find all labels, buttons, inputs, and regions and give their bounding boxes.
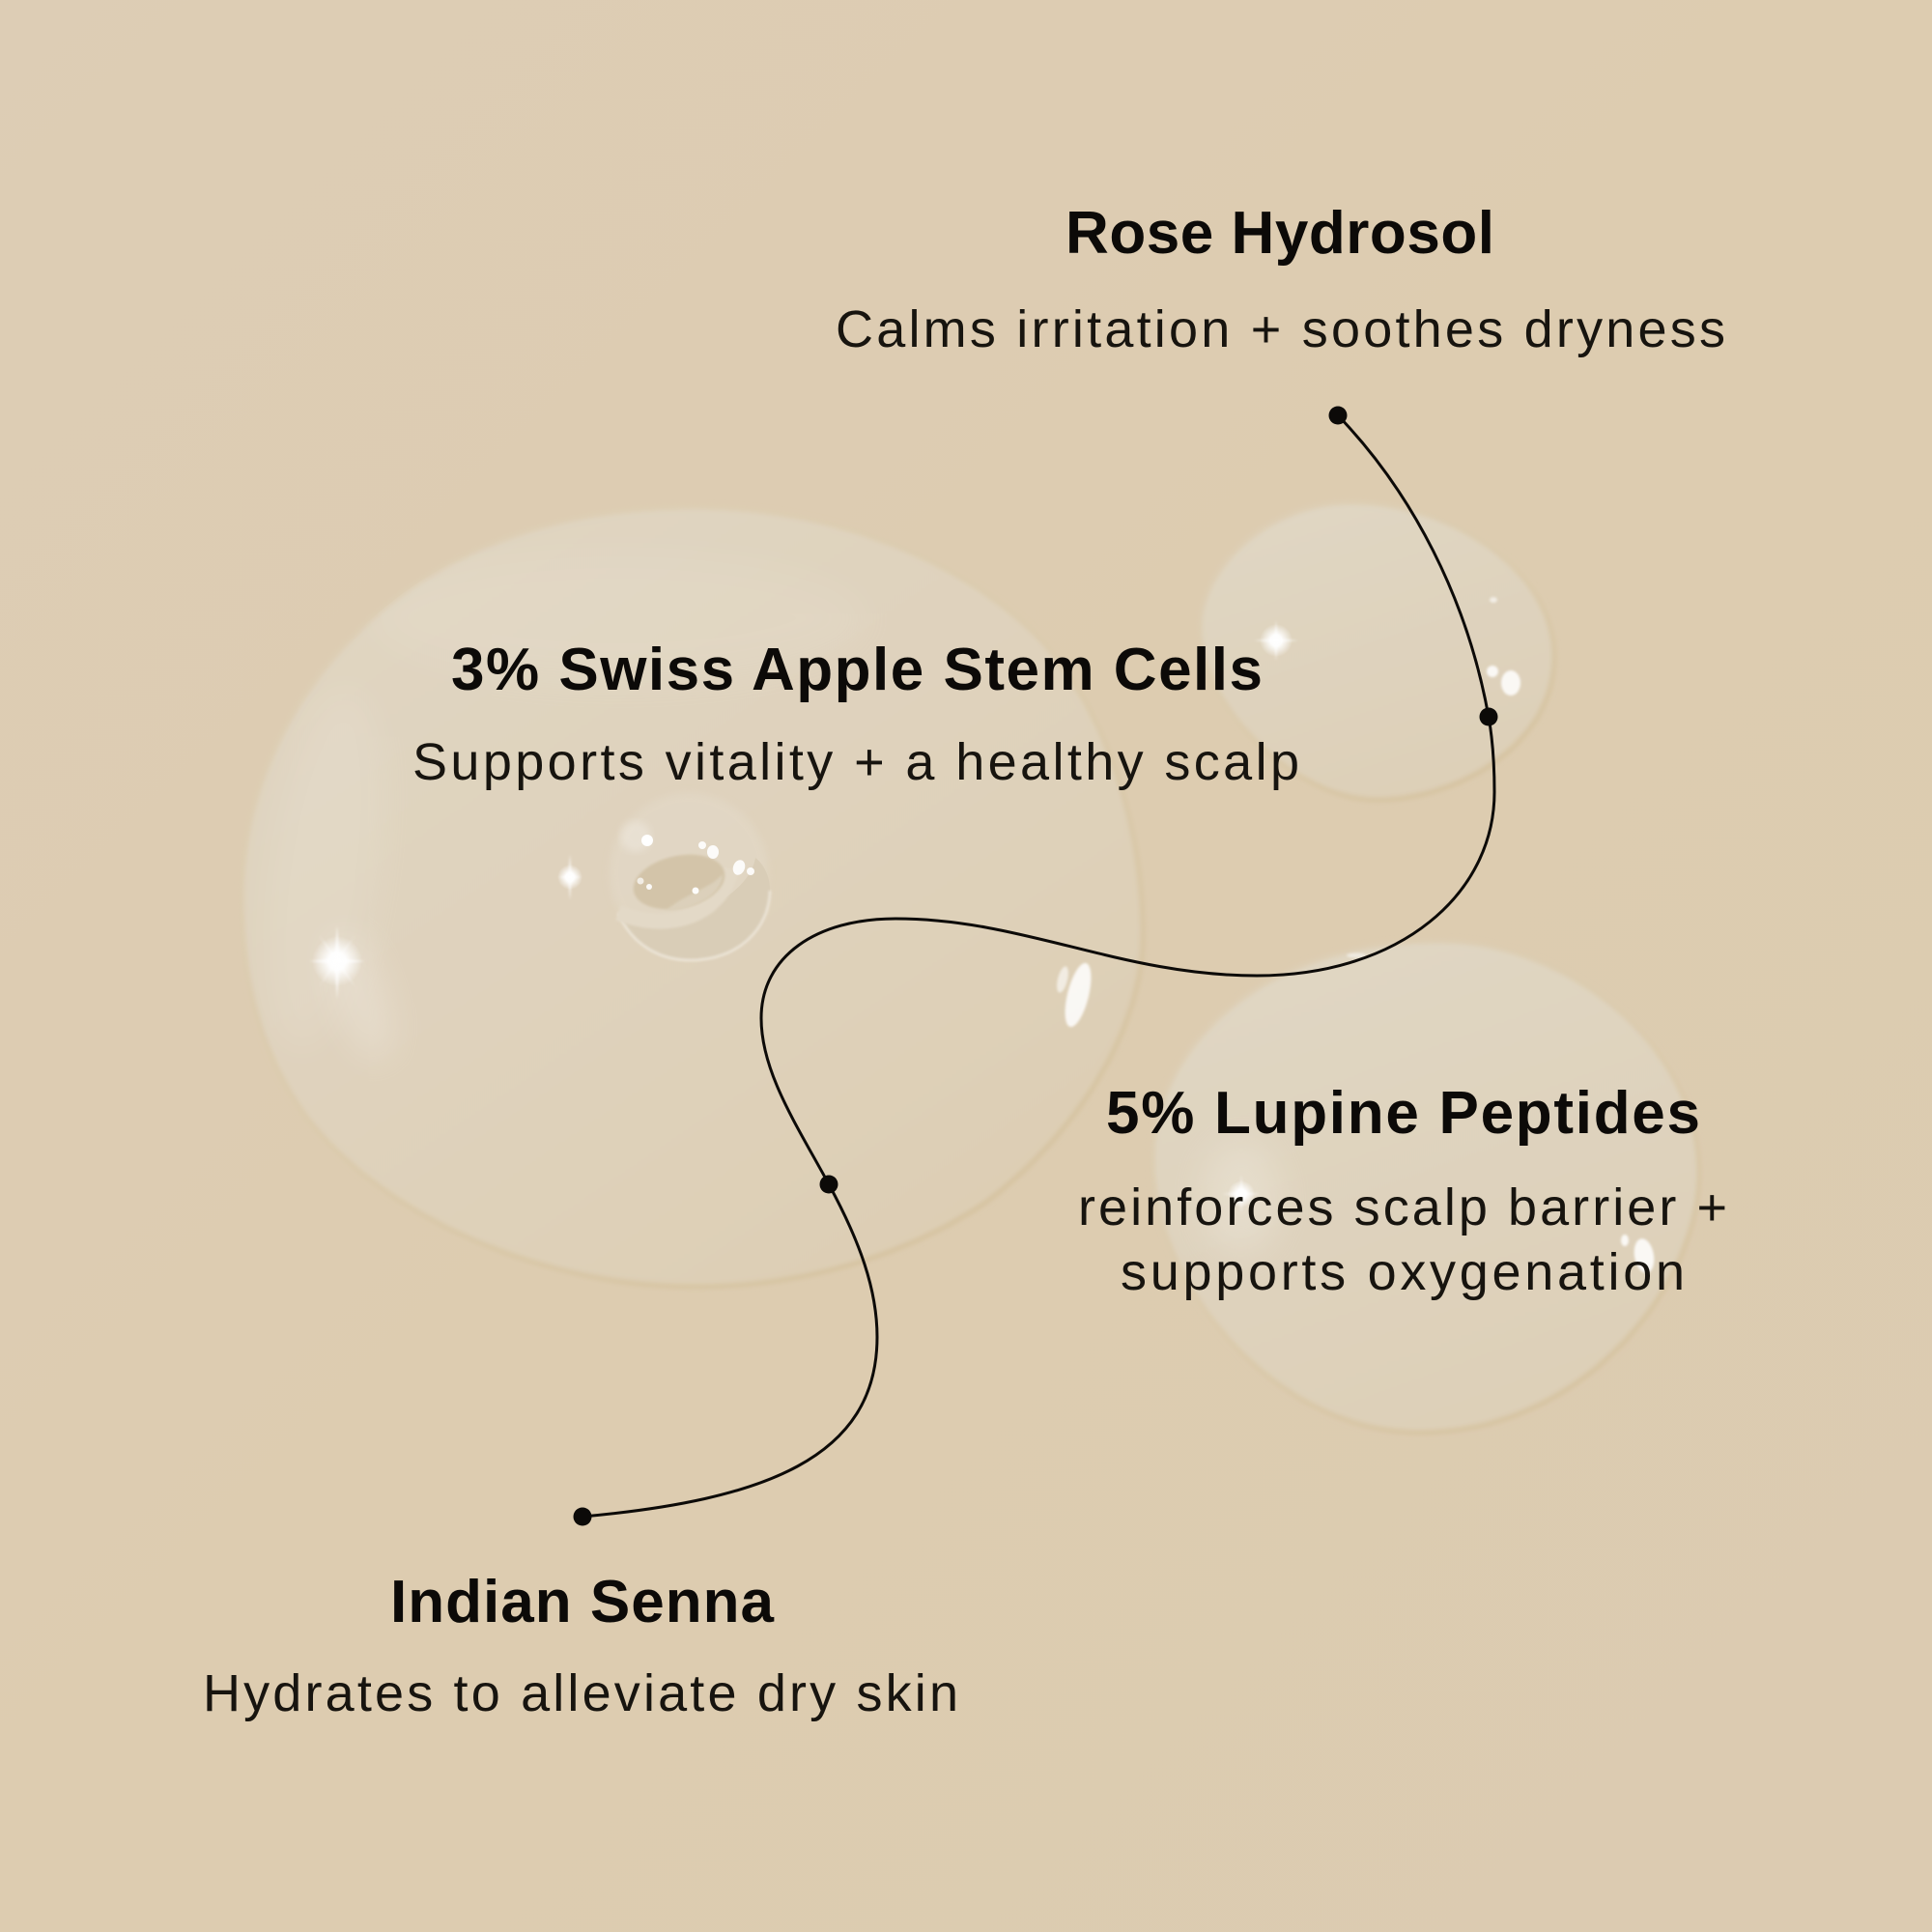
dot: Indian Senna end [574,1507,591,1526]
heading: Rose Hydrosol [1065,200,1494,267]
dot: large drop [819,1175,838,1194]
sparkle: lower drop highlight [1222,1175,1261,1213]
heading: 5% Lupine Peptides [1106,1080,1700,1147]
heading: Indian Senna [390,1569,775,1635]
dot: small drop [1480,707,1497,726]
highlight: small drop reflections [1487,597,1520,696]
description: reinforces scalp barrier + [1078,1179,1727,1236]
description: Supports vitality + a healthy scalp [412,733,1299,791]
sparkle: small drop highlight [1254,620,1298,661]
sparkle: inner highlight [557,854,582,900]
description second line: supports oxygenation [1121,1243,1685,1301]
droplet: lower right drop [1152,941,1699,1433]
heading: 3% Swiss Apple Stem Cells [451,637,1263,703]
label: Swiss Apple Stem Cells [412,637,1299,791]
label: Indian Senna [203,1569,958,1722]
description: Calms irritation + soothes dryness [836,300,1725,358]
droplet: large serum drop [242,507,1143,1287]
highlight: lower drop reflections [1347,952,1657,1274]
label: Rose Hydrosol [836,200,1725,358]
description: Hydrates to alleviate dry skin [203,1664,958,1722]
bubble in centre of drop [610,793,770,960]
label: Lupine Peptides [1078,1080,1727,1301]
dot: Rose Hydrosol start [1329,406,1347,425]
highlight: oval reflections [1055,960,1096,1030]
connector line with dots [574,406,1497,1526]
droplet: small top right drop [1200,502,1554,800]
sparkle: left highlight [309,925,365,999]
